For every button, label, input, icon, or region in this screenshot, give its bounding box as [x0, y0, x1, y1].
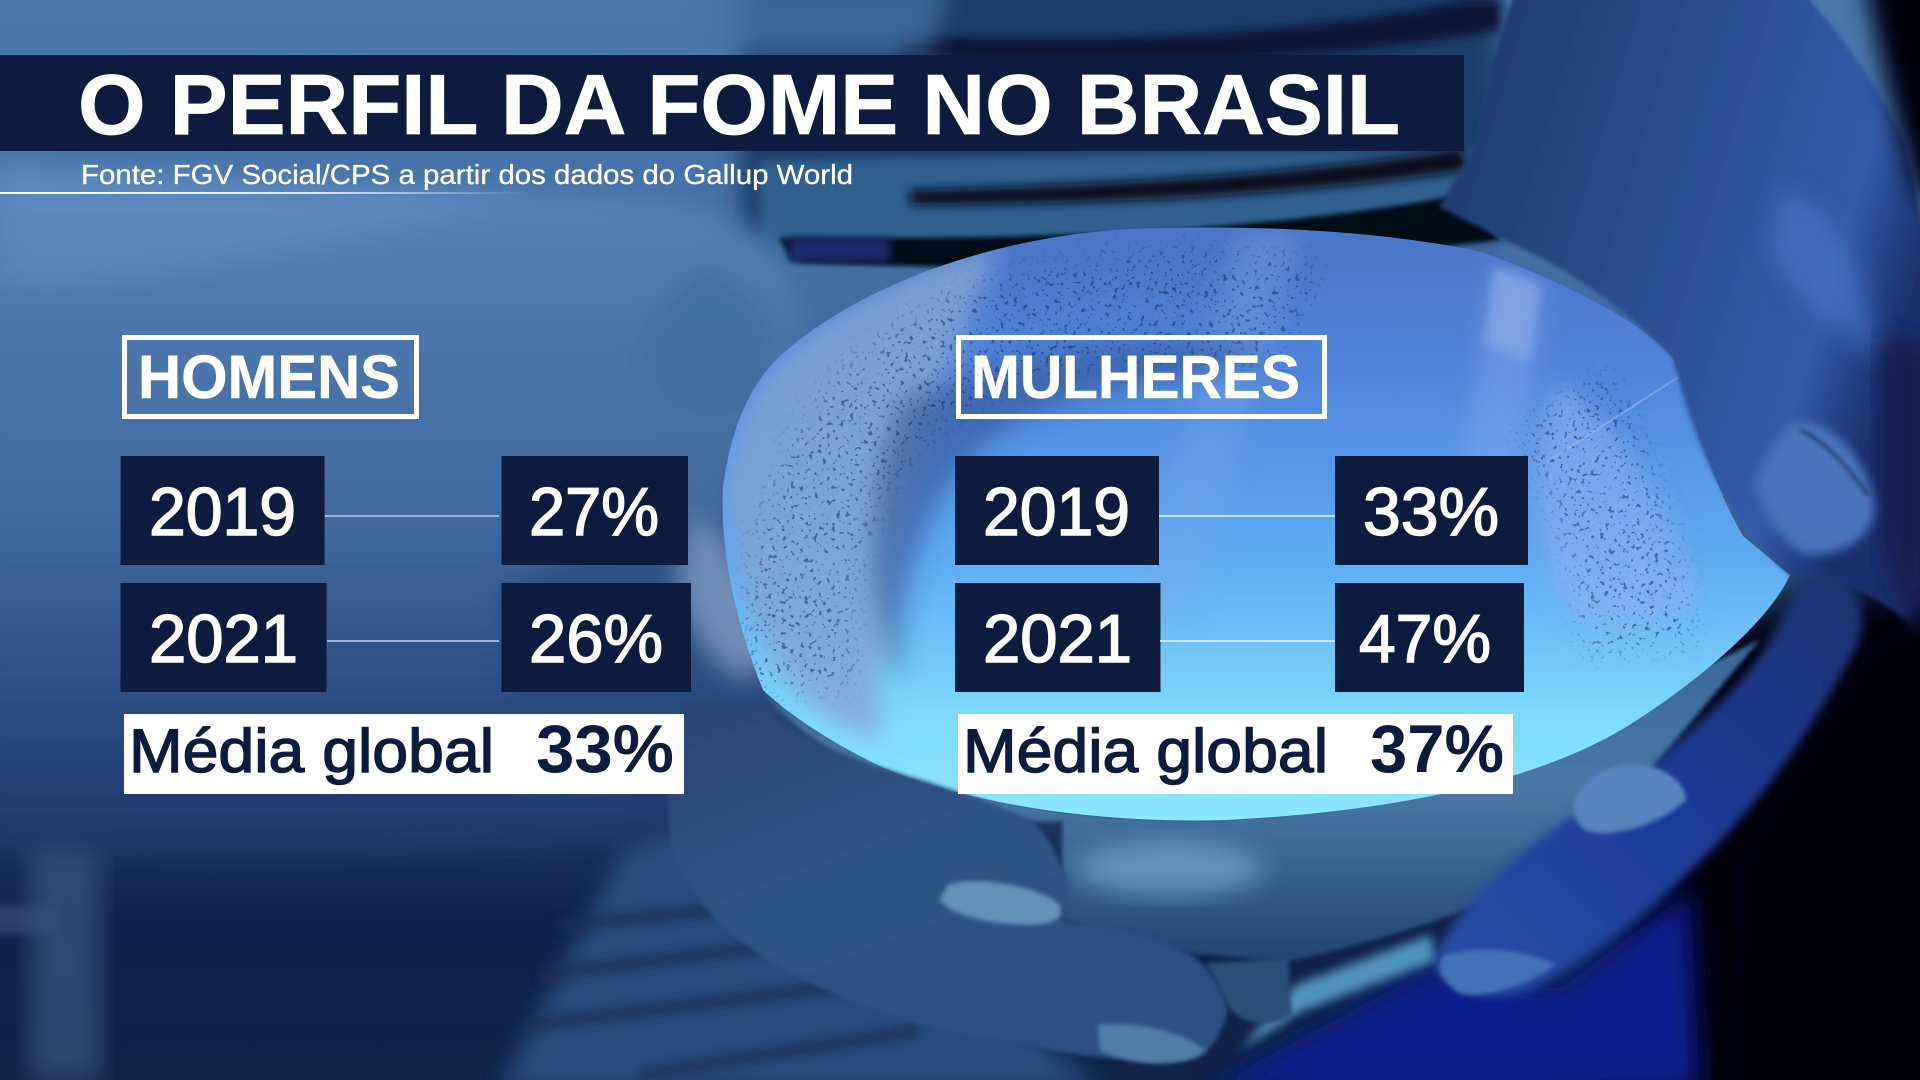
- source line: Fonte: FGV Social/CPS a partir dos dados do Gallup World: [81, 159, 853, 190]
- row: homens 2021: 26%: [529, 601, 663, 677]
- right hand and thumb: [1439, 0, 1920, 660]
- row: homens 2021: 2021: [149, 601, 298, 677]
- row: homens 2019: [120, 456, 688, 565]
- shirt stripes, bottom: [500, 800, 1100, 1080]
- lower right hand fingers: [1433, 574, 1862, 996]
- thumb nail: [1757, 422, 1875, 554]
- callout: mulheres global average: 37%: [1370, 711, 1504, 787]
- row: mulheres 2021: [955, 583, 1524, 692]
- specks of food residue: [732, 235, 1706, 704]
- callout: homens global average: [124, 711, 684, 794]
- finger nails: [1574, 764, 1686, 833]
- heading: mulheres: MULHERES: [971, 343, 1300, 411]
- bottom-left shadow and light streak: [0, 830, 100, 1080]
- panel: mulheres: [955, 338, 1528, 794]
- row: mulheres 2019: 33%: [1363, 474, 1499, 550]
- bowl inner surface: [723, 227, 1790, 820]
- row: mulheres 2021: 2021: [983, 601, 1132, 677]
- callout: homens global average: Média global: [129, 717, 494, 785]
- left hand and arm: [0, 160, 804, 855]
- bowl: [720, 220, 1800, 962]
- panel: homens: [120, 338, 691, 794]
- row: homens 2021: [120, 583, 691, 692]
- title banner: O PERFIL DA FOME NO BRASIL: [78, 58, 1400, 153]
- row: homens 2019: 27%: [529, 474, 659, 550]
- shirt stripes, top: [680, 0, 1500, 268]
- lower left hand fingers: [669, 700, 1292, 1064]
- finger behind: [1206, 958, 1292, 1023]
- row: mulheres 2019: [955, 456, 1528, 565]
- row: mulheres 2019: 2019: [983, 474, 1130, 550]
- callout: homens global average: 33%: [536, 711, 674, 787]
- dark right side and blue shirt: [1206, 600, 1920, 1080]
- callout: mulheres global average: Média global: [963, 717, 1328, 785]
- dark right side backdrop: [1600, 560, 1920, 1080]
- callout: mulheres global average: [958, 711, 1513, 794]
- heading: homens: HOMENS: [138, 343, 400, 411]
- row: mulheres 2021: 47%: [1359, 601, 1491, 677]
- finger nails: [940, 881, 1061, 925]
- row: homens 2019: 2019: [149, 474, 296, 550]
- bowl outer body: [762, 640, 1760, 962]
